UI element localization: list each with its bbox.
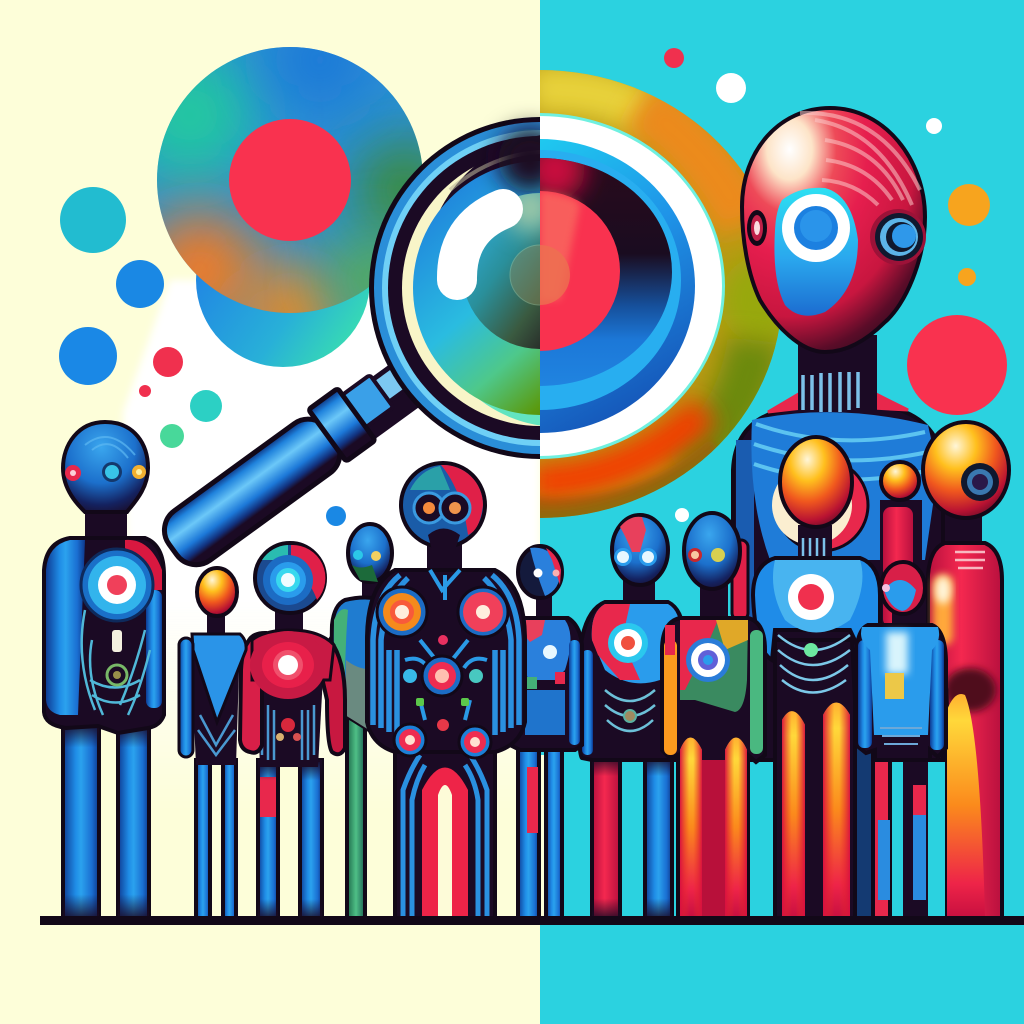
big robot shoulders red [768, 392, 908, 412]
big robot leg [853, 740, 875, 918]
central figure torso [367, 570, 525, 752]
red centre of large circle [229, 119, 351, 241]
figure 3: red-chest figure [240, 543, 345, 918]
large circle behind lens, right side [540, 70, 779, 518]
white light cone [123, 280, 540, 810]
decorative dots left [59, 187, 346, 526]
figure 11: small orb figure [880, 462, 922, 627]
lens white highlight [457, 209, 503, 280]
figure 3 arms [240, 633, 265, 753]
figure 1 head [63, 422, 148, 512]
big robot torso [733, 404, 943, 760]
figure 10 flame legs [782, 702, 850, 917]
magnifier handle [153, 342, 439, 574]
figure 1 chest target [81, 549, 153, 621]
magnifier lens [355, 113, 725, 459]
central figure legs block [395, 745, 495, 918]
figure 1: left tall figure [44, 422, 164, 918]
figure 8 legs [680, 738, 747, 918]
red ring behind head [776, 459, 868, 551]
figure 13: small right figure [856, 562, 946, 918]
big robot head [742, 108, 925, 352]
figure 7: blue/red figure [579, 515, 684, 918]
big robot side eye [747, 210, 767, 246]
central figure chest lights [377, 587, 427, 637]
lens left half [369, 109, 540, 459]
figure 6: slim blue figure [510, 546, 582, 918]
figure 3 shoulders [252, 630, 334, 680]
background: right cyan panel [540, 0, 1024, 1024]
figure 10: front middle figure [753, 437, 880, 920]
big robot face panel [774, 188, 858, 316]
big robot neck [798, 335, 877, 412]
figure 1 torso [44, 538, 164, 733]
lens right half [540, 113, 725, 459]
figure 8: red/green figure [662, 513, 765, 918]
figure 2: small blue figure [179, 568, 246, 918]
figure 5: central ornate figure [367, 463, 525, 918]
big robot [733, 108, 943, 918]
figure 12: far-right figure [923, 422, 1009, 920]
figure 1 legs [63, 722, 149, 918]
lens inner disc [466, 193, 540, 349]
large multicolour circle [157, 47, 422, 313]
blue gradient circle behind [196, 193, 370, 367]
decorative dots right [664, 48, 1007, 522]
figure 8 red back arm [732, 540, 748, 620]
figure 3 chest disc [250, 631, 326, 699]
central figure head [401, 463, 485, 547]
ground line [40, 916, 1024, 925]
background: left cream panel [0, 0, 540, 1024]
figure 4: green figure behind [332, 524, 392, 918]
big robot ear [870, 209, 926, 265]
